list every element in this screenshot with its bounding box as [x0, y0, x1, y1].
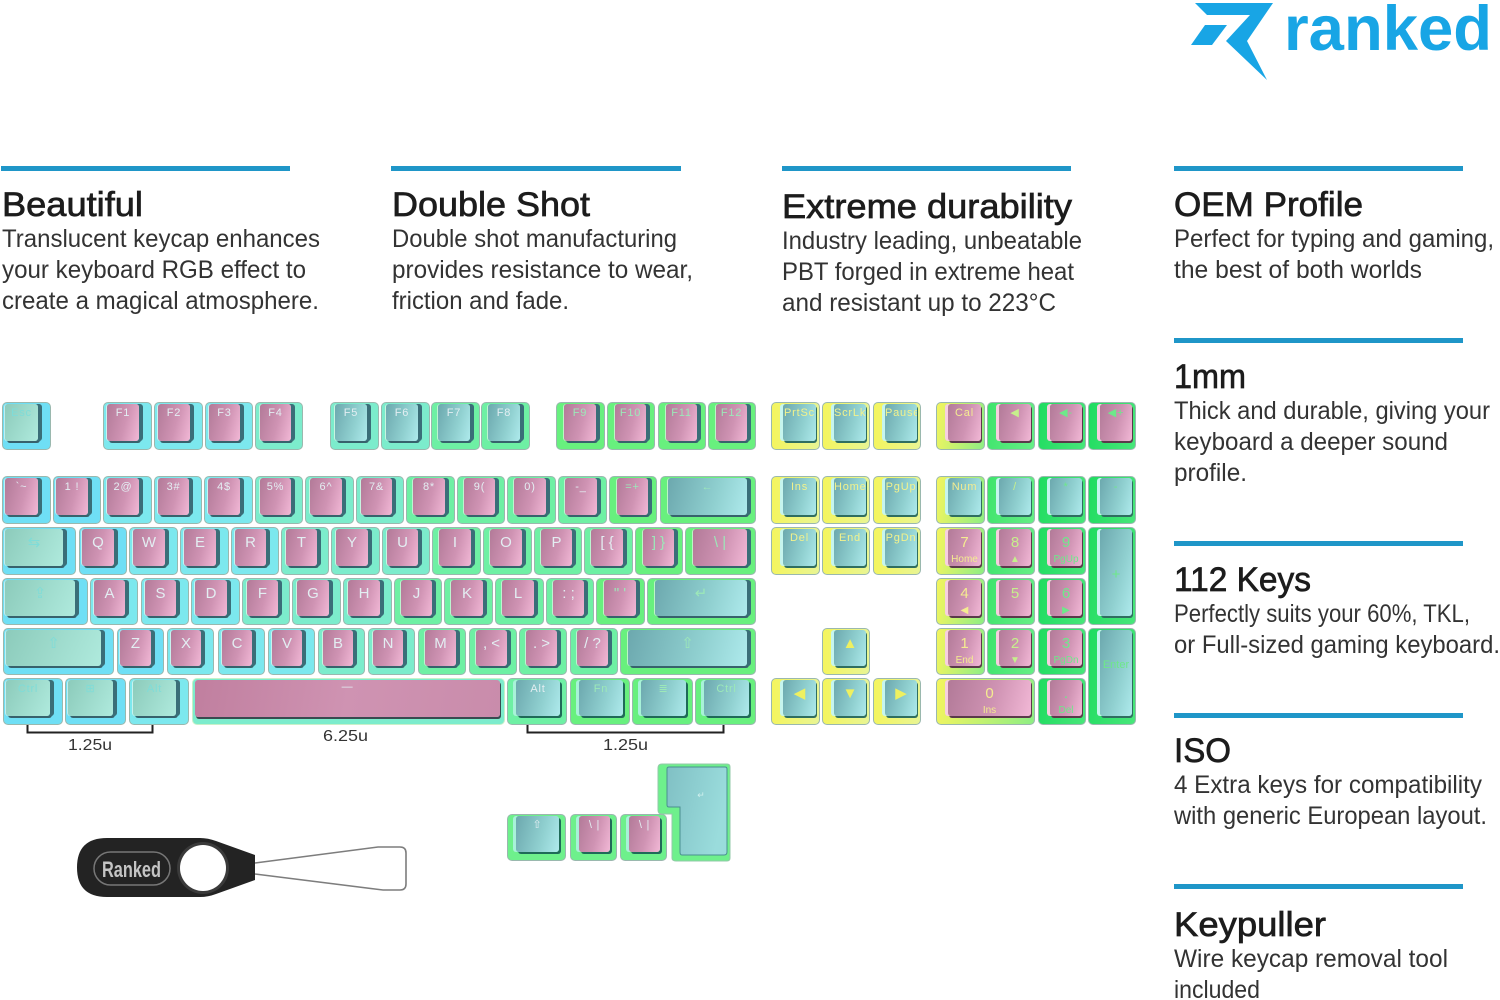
function key row: F4 — [268, 407, 283, 419]
ZXCV key row: X — [181, 635, 191, 652]
number key row: -_ — [575, 481, 587, 493]
number key row: `~ — [16, 481, 27, 493]
ZXCV key row: ▲ — [843, 635, 857, 652]
QWERTY key row: ] } — [652, 534, 665, 551]
ISO backslash key 1 — [570, 814, 617, 861]
feature: Extreme durability — [782, 166, 1082, 317]
function key row: F11 — [671, 407, 692, 419]
ASDF key row: 5 — [1011, 585, 1019, 602]
ZXCV key row: . > — [533, 635, 550, 652]
feature: ISO — [1173, 713, 1487, 830]
ASDF key row: 4 — [960, 585, 969, 602]
ASDF key row: L — [514, 585, 522, 602]
feature: Extreme durability: Industry leading, unbeatable — [782, 227, 1082, 255]
QWERTY key row: [ { — [600, 534, 614, 551]
number key row: 3# — [167, 481, 180, 493]
QWERTY key row: U — [397, 534, 408, 551]
QWERTY key row: W — [142, 534, 156, 551]
feature: OEM Profile: Perfect for typing and gaming, — [1174, 225, 1494, 253]
ZXCV key row: M — [434, 635, 447, 652]
number key row: 0) — [524, 481, 536, 493]
QWERTY key row: Q — [92, 534, 104, 551]
QWERTY key row: Y — [347, 534, 357, 551]
bottom key row — [3, 678, 1086, 725]
QWERTY key row: P — [551, 534, 562, 551]
ZXCV key row: End — [956, 655, 973, 666]
QWERTY key row: T — [297, 534, 306, 551]
number key row: / — [1013, 481, 1017, 493]
feature: Extreme durability: Extreme durability — [782, 188, 1072, 226]
QWERTY key row: 9 — [1062, 534, 1070, 551]
feature: Beautiful: your keyboard RGB effect to — [2, 256, 306, 284]
feature: OEM Profile — [1174, 166, 1494, 284]
bottom key row: Alt — [530, 683, 546, 695]
icon: keycap puller: Ranked — [102, 857, 161, 882]
ZXCV key row: N — [383, 635, 393, 652]
QWERTY key row: Home — [951, 554, 978, 565]
ASDF key row: J — [413, 585, 420, 602]
ZXCV key row: 3 — [1062, 635, 1070, 652]
bottom key row: — — [342, 681, 353, 693]
bottom key row: Ctrl — [716, 683, 737, 695]
ISO extra keys — [507, 764, 730, 862]
feature: Double Shot: Double shot manufacturing — [392, 225, 677, 253]
function key row: F10 — [620, 407, 641, 419]
feature: 1mm: 1mm — [1174, 358, 1246, 396]
bottom key row: Ins — [983, 705, 996, 716]
feature: Beautiful: create a magical atmosphere. — [2, 287, 319, 315]
keyboard — [2, 402, 1136, 725]
QWERTY key row: ▲ — [1010, 554, 1020, 565]
ASDF key row: ⇪ — [34, 585, 46, 602]
function key row: F6 — [395, 407, 409, 419]
feature: 1mm — [1174, 338, 1490, 487]
QWERTY key row: R — [245, 534, 256, 551]
bottom key row: 0 — [985, 685, 994, 702]
function key row: Cal — [955, 407, 974, 419]
ZXCV key row: PgDn — [1053, 655, 1078, 666]
feature: Double Shot — [391, 166, 693, 315]
number key row: 4$ — [217, 481, 231, 493]
ISO enter key: ↵ — [697, 790, 705, 800]
bottom key row: ⊞ — [85, 683, 96, 695]
ASDF key row: D — [206, 585, 216, 602]
ISO shift key — [507, 814, 566, 861]
feature: Double Shot: provides resistance to wear, — [392, 256, 693, 284]
QWERTY key row: PgDn — [886, 532, 916, 544]
number key row: =+ — [625, 481, 640, 493]
number key row: Ins — [791, 481, 808, 493]
label: 6.25u: 6.25u — [323, 728, 368, 745]
feature: Keypuller: Keypuller — [1174, 906, 1326, 944]
function key row: F7 — [447, 407, 461, 419]
number key row: 8* — [423, 481, 435, 493]
number key row: 9( — [474, 481, 485, 493]
ASDF key row: : ; — [562, 585, 575, 602]
ASDF key row: H — [359, 585, 369, 602]
feature: OEM Profile: OEM Profile — [1174, 186, 1363, 224]
QWERTY key row: Del — [790, 532, 809, 544]
ASDF key row: A — [104, 585, 114, 602]
function key row: ◀- — [1059, 407, 1073, 419]
ASDF key row: ◀ — [961, 605, 968, 616]
feature: 1mm: keyboard a deeper sound — [1174, 428, 1448, 456]
QWERTY key row: \ | — [714, 534, 726, 551]
feature: ISO: ISO — [1174, 732, 1231, 770]
number key row: Num — [952, 481, 977, 493]
feature: 1mm: Thick and durable, giving your — [1174, 397, 1490, 425]
bottom key row: Ctrl — [18, 683, 38, 695]
function key row: F3 — [217, 407, 232, 419]
function key row: ◀+ — [1108, 407, 1124, 419]
QWERTY key row: E — [195, 534, 205, 551]
ISO backslash key 2: \ | — [639, 819, 650, 831]
ZXCV key row: ⇧ — [47, 635, 60, 652]
function key row: ScrLk — [834, 407, 866, 419]
feature: ISO: with generic European layout. — [1173, 802, 1487, 830]
function key row: ◀ — [1010, 407, 1020, 419]
ASDF key row: ▶ — [1062, 605, 1070, 616]
number key row: 5% — [267, 481, 284, 493]
ZXCV key row: 2 — [1011, 635, 1019, 652]
ASDF key row: G — [307, 585, 319, 602]
ISO backslash key 1: \ | — [589, 819, 600, 831]
ZXCV key row: , < — [483, 635, 500, 652]
bottom key row: . — [1064, 685, 1068, 702]
number key row: Home — [834, 481, 866, 493]
number key row: 2@ — [114, 481, 132, 493]
logo: ranked — [1191, 0, 1492, 80]
feature: 112 Keys: Perfectly suits your 60%, TKL, — [1174, 600, 1470, 628]
ZXCV key row: V — [282, 635, 292, 652]
QWERTY key row: + — [1112, 566, 1120, 583]
feature: Keypuller: Wire keycap removal tool — [1174, 945, 1448, 973]
function key row — [2, 402, 1136, 450]
QWERTY key row — [2, 527, 1136, 725]
bottom key row: ◀ — [794, 685, 805, 702]
ZXCV key row: 1 — [960, 635, 969, 652]
ZXCV key row: Enter — [1103, 659, 1129, 671]
bottom key row: ▶ — [895, 685, 907, 702]
ASDF key row: K — [462, 585, 472, 602]
bottom key row: Alt — [147, 683, 162, 695]
feature: Beautiful: Beautiful — [2, 186, 143, 224]
feature: ISO: 4 Extra keys for compatibility — [1174, 771, 1482, 799]
feature: 112 Keys: 112 Keys — [1174, 561, 1311, 599]
QWERTY key row: End — [839, 532, 861, 544]
ASDF key row: ↵ — [695, 585, 707, 602]
feature: Beautiful: Translucent keycap enhances — [2, 225, 320, 253]
feature: Beautiful — [1, 166, 320, 315]
ZXCV key row — [3, 628, 1136, 725]
ASDF key row: 6 — [1062, 585, 1070, 602]
bottom key row: ≣ — [658, 683, 669, 695]
function key row: F2 — [167, 407, 181, 419]
ISO enter key — [658, 764, 730, 862]
function key row: F9 — [573, 407, 587, 419]
feature: OEM Profile: the best of both worlds — [1174, 256, 1422, 284]
function key row: Esc — [11, 407, 32, 419]
feature: Extreme durability: and resistant up to 223°C — [782, 289, 1056, 317]
ISO backslash key 2 — [620, 814, 667, 861]
QWERTY key row: 8 — [1011, 534, 1019, 551]
ZXCV key row: ⇧ — [681, 635, 694, 652]
number key row: * — [1063, 481, 1069, 493]
feature: Double Shot: Double Shot — [392, 186, 591, 224]
ZXCV key row: / ? — [584, 635, 601, 652]
ASDF key row — [2, 578, 1086, 625]
ZXCV key row: B — [333, 635, 343, 652]
function key row: F8 — [497, 407, 511, 419]
bottom key row: ▼ — [843, 685, 857, 702]
ASDF key row: " ' — [614, 585, 626, 602]
feature: Extreme durability: PBT forged in extreme heat — [782, 258, 1074, 286]
number key row: 7& — [369, 481, 384, 493]
QWERTY key row: ⇆ — [28, 534, 40, 551]
QWERTY key row: O — [500, 534, 512, 551]
bracket: 1.25u right: 1.25u — [603, 737, 648, 754]
ISO shift key: ⇧ — [532, 819, 543, 831]
feature: Double Shot: friction and fade. — [392, 287, 569, 315]
number key row: - — [1114, 481, 1118, 493]
ZXCV key row: C — [232, 635, 242, 652]
feature: 1mm: profile. — [1174, 459, 1247, 487]
ASDF key row: F — [258, 585, 267, 602]
bottom key row: Del — [1058, 705, 1074, 716]
number key row: 6^ — [320, 481, 332, 493]
ZXCV key row: ▼ — [1010, 655, 1020, 666]
feature: Keypuller — [1174, 884, 1463, 1000]
QWERTY key row: I — [453, 534, 457, 551]
QWERTY key row: PgUp — [1053, 554, 1078, 565]
ZXCV key row: Z — [131, 635, 140, 652]
number key row: PgUp — [886, 481, 916, 493]
number key row — [2, 476, 1136, 524]
function key row: F5 — [344, 407, 358, 419]
QWERTY key row: 7 — [960, 534, 969, 551]
bottom key row: Fn — [594, 683, 608, 695]
feature: 112 Keys — [1174, 541, 1500, 659]
ASDF key row: S — [155, 585, 166, 602]
function key row: F1 — [116, 407, 130, 419]
function key row: PrtSc — [784, 407, 815, 419]
bracket: 1.25u left — [28, 725, 152, 754]
icon: keycap puller — [77, 838, 406, 897]
bracket: 1.25u right — [528, 725, 724, 754]
number key row: ← — [702, 481, 713, 493]
number key row: 1 ! — [65, 481, 79, 493]
function key row: F12 — [721, 407, 742, 419]
bracket: 1.25u left: 1.25u — [68, 737, 112, 754]
